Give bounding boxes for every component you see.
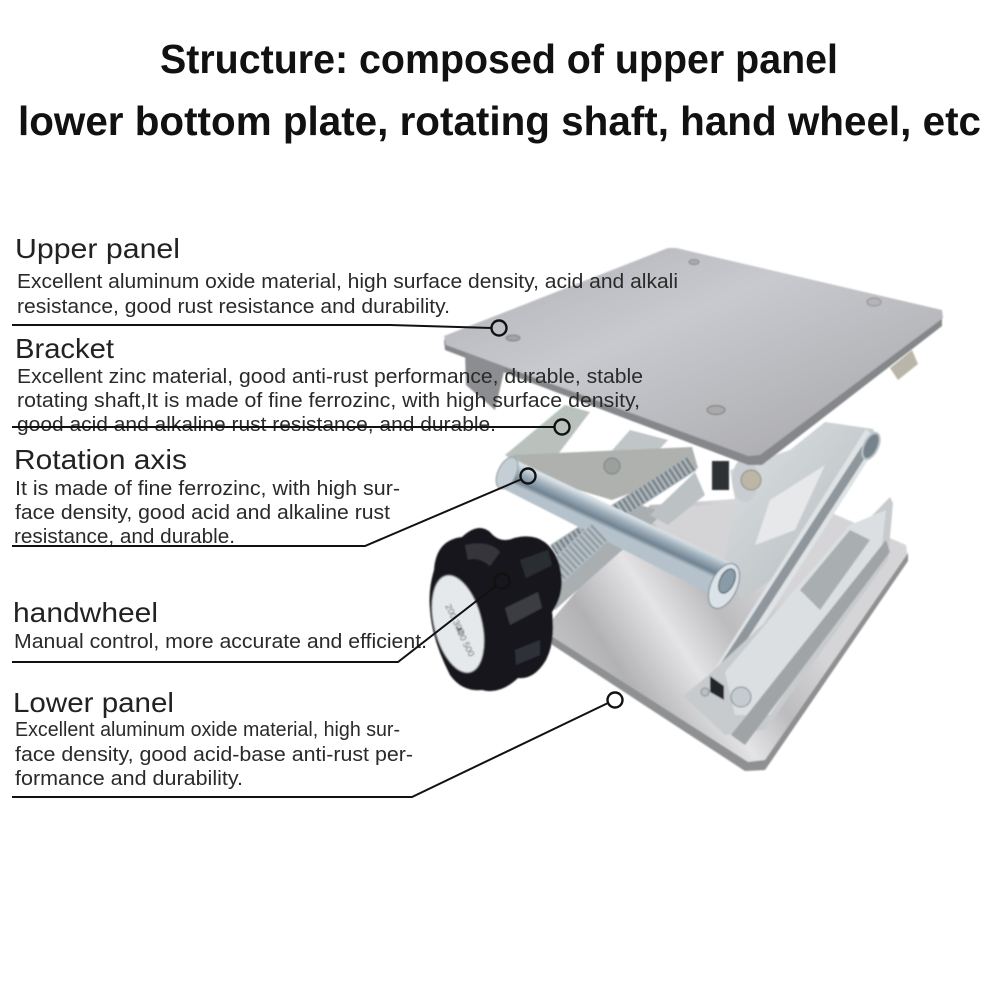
lifting platform product illustration [423, 248, 943, 771]
rotating shaft [492, 454, 746, 613]
screw collar to handwheel [550, 532, 600, 578]
label: bracket: good acid and alkaline rust resistance, and durable. [17, 414, 496, 436]
label: rotation axis: face density, good acid and alkaline rust [15, 502, 390, 524]
label: lower panel [12, 687, 622, 797]
left upper arm [505, 405, 590, 478]
label: upper panel: Upper panel [15, 233, 180, 264]
label: lower panel: Lower panel [13, 687, 174, 718]
upper panel [444, 248, 943, 465]
label: upper panel [12, 233, 678, 336]
hand wheel: 200 300 [443, 602, 466, 636]
label: bracket [12, 333, 643, 436]
lower plate [545, 495, 908, 771]
title: lower bottom plate, rotating shaft, hand wheel, etc [18, 98, 981, 144]
label: upper panel: Excellent aluminum oxide material, high surface density, acid and alkali [17, 271, 678, 293]
title [18, 36, 981, 144]
hand wheel [423, 528, 562, 691]
label: rotation axis: Rotation axis [14, 444, 187, 475]
hand wheel: 400 500 [453, 624, 476, 658]
label: rotation axis [12, 444, 536, 548]
rear scissor arms and rear bar [530, 430, 815, 610]
flat link with pivot [512, 447, 698, 500]
label: upper panel: resistance, good rust resistance and durability. [17, 296, 450, 318]
label: lower panel: formance and durability. [15, 768, 243, 790]
right scissor bracket [683, 422, 893, 745]
label: rotation axis: resistance, and durable. [14, 526, 235, 548]
label: lower panel: Excellent aluminum oxide material, high sur- [15, 719, 400, 741]
title: Structure: composed of upper panel [160, 36, 838, 82]
label: rotation axis: It is made of fine ferrozinc, with high sur- [15, 478, 400, 500]
label: bracket: rotating shaft,It is made of fine ferrozinc, with high surface density, [17, 390, 640, 412]
threaded lead screw [555, 463, 692, 552]
label: handwheel: Manual control, more accurate and efficient. [14, 631, 427, 653]
label: lower panel: face density, good acid-base anti-rust per- [15, 744, 413, 766]
label: handwheel: handwheel [13, 597, 158, 628]
label: bracket: Excellent zinc material, good anti-rust performance, durable, stable [17, 366, 643, 388]
label: handwheel [12, 574, 510, 662]
label: bracket: Bracket [15, 333, 114, 364]
